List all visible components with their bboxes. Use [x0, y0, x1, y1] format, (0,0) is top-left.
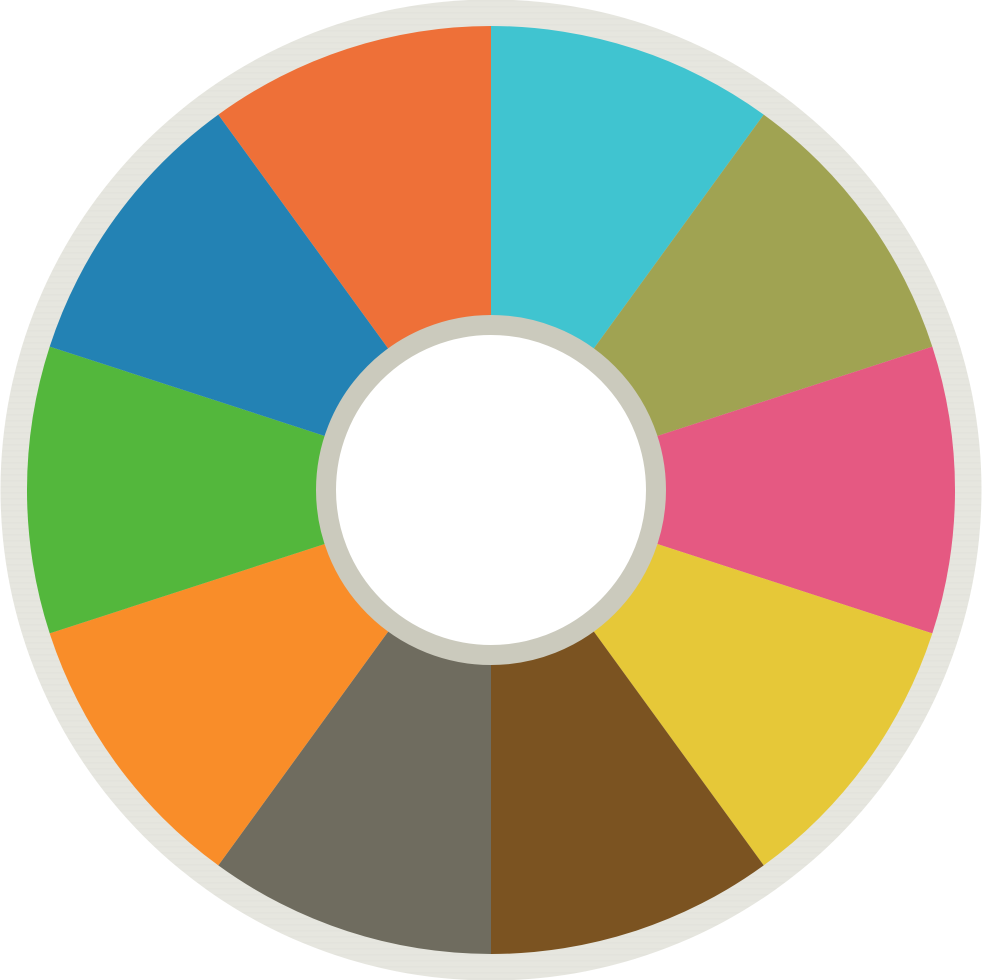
segment: red-orange [218, 26, 491, 490]
segment: grey [218, 490, 491, 954]
segment: brown [491, 490, 764, 954]
segment: green [27, 347, 491, 633]
segment: blue [50, 115, 491, 490]
segment: cyan [491, 26, 764, 490]
inner ring [326, 325, 656, 655]
segment: yellow [491, 490, 932, 865]
segment: olive [491, 115, 932, 490]
segment: pink [491, 347, 955, 633]
segment: orange [50, 490, 491, 865]
